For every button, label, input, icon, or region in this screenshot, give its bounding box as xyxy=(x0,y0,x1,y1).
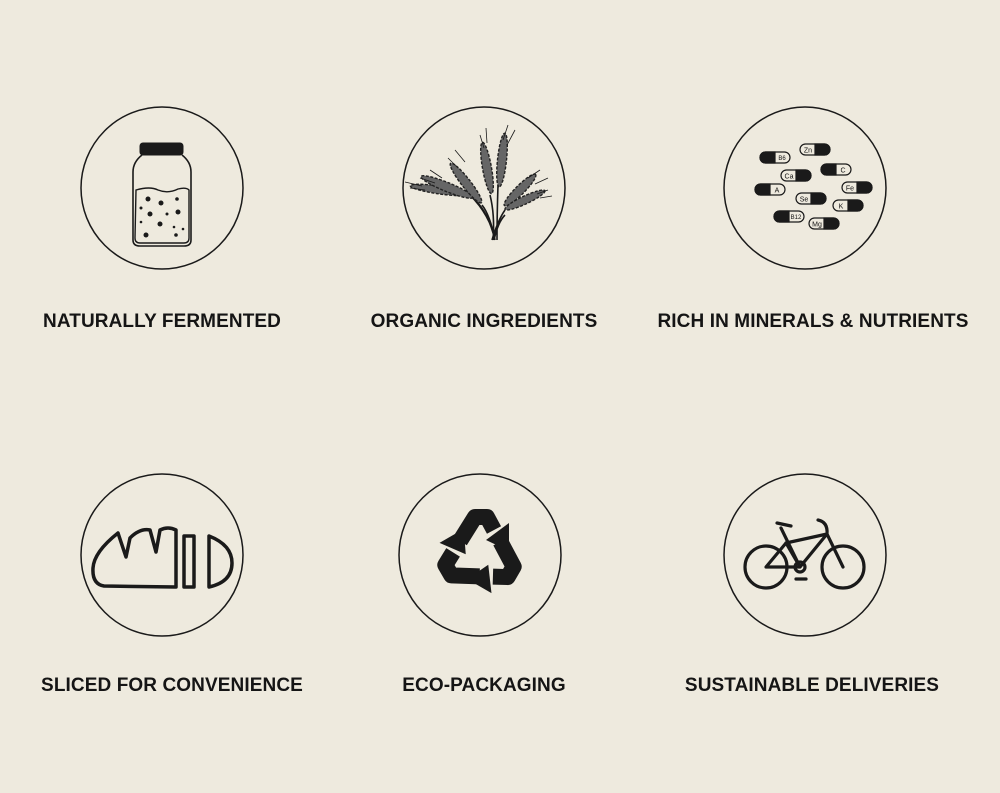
icon: mineral pills: C xyxy=(840,168,846,174)
icon: wheat xyxy=(403,107,565,269)
icon: mineral pills xyxy=(724,107,886,269)
icon: sliced bread xyxy=(81,474,243,636)
label: naturally fermented: NATURALLY FERMENTED xyxy=(43,311,281,332)
icon: bicycle xyxy=(724,474,886,636)
icon: recycle xyxy=(399,474,561,636)
icon: mineral pills: Ca xyxy=(785,174,794,180)
icon: mineral pills: Zn xyxy=(804,148,812,154)
icon: mineral pills: Mg xyxy=(812,222,822,228)
label: rich in minerals: RICH IN MINERALS & NUTRIENTS xyxy=(657,311,969,332)
label: eco-packaging: ECO-PACKAGING xyxy=(402,675,566,696)
label: sliced: SLICED FOR CONVENIENCE xyxy=(41,675,303,696)
icon: jar xyxy=(81,107,243,269)
label: sustainable deliveries: SUSTAINABLE DELIVERIES xyxy=(685,675,939,696)
label: organic ingredients: ORGANIC INGREDIENTS xyxy=(371,311,597,332)
icon: mineral pills: Se xyxy=(800,196,808,204)
icon: mineral pills: K xyxy=(839,204,844,210)
icon: mineral pills: B6 xyxy=(778,156,786,162)
icon: mineral pills: B12 xyxy=(791,215,802,221)
icon: mineral pills: Fe xyxy=(846,186,854,192)
icon: mineral pills: A xyxy=(775,188,780,194)
